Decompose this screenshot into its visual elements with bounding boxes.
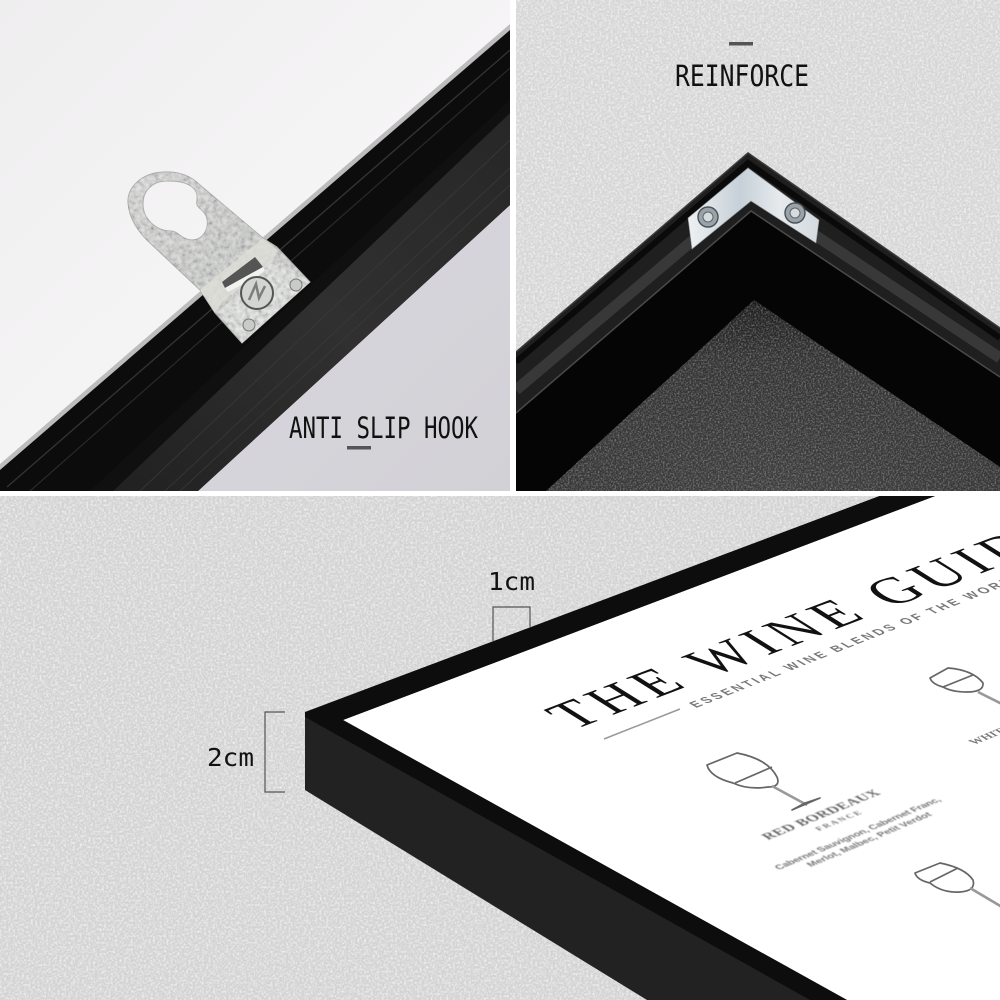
text: red bordeaux: Cabernet Sauvignon, Cabernet Franc, bbox=[772, 796, 944, 872]
panel: reinforce bbox=[516, 0, 1000, 491]
label: reinforce: REINFORCE bbox=[675, 59, 809, 93]
icon: wine glass red bordeaux bbox=[707, 753, 820, 810]
overline dash bbox=[729, 42, 753, 46]
frame front bbox=[305, 496, 935, 1000]
felt backing bbox=[546, 300, 1000, 491]
dimension bracket: 2cm: 2cm bbox=[207, 743, 254, 772]
panel: anti slip hook bbox=[0, 0, 510, 491]
text: red bordeaux: FRANCE bbox=[812, 809, 864, 832]
label: anti slip hook: ANTI SLIP HOOK bbox=[289, 411, 478, 445]
dimension bracket: 1cm: 1cm bbox=[488, 567, 535, 596]
poster bbox=[343, 493, 1000, 1000]
icon: wine glass upper right bbox=[930, 668, 1000, 704]
frame corner bbox=[516, 153, 1000, 491]
accent rule bbox=[604, 709, 680, 739]
text: red bordeaux: RED BORDEAUX bbox=[758, 788, 885, 842]
underline dash bbox=[347, 446, 371, 450]
frame side wall bbox=[305, 712, 815, 1000]
icon: corner bracket bbox=[688, 168, 819, 249]
icon: wine glass lower right bbox=[915, 863, 1000, 907]
dimension bracket: 2cm bbox=[207, 712, 285, 792]
frame profile bbox=[0, 30, 510, 491]
icon: metal hanging hook bbox=[128, 172, 310, 343]
dimension bracket: 1cm bbox=[491, 572, 534, 641]
text: red bordeaux: Merlot, Malbec, Petit Verdot bbox=[804, 811, 936, 869]
panel: frame dimensions bbox=[0, 492, 1000, 1000]
